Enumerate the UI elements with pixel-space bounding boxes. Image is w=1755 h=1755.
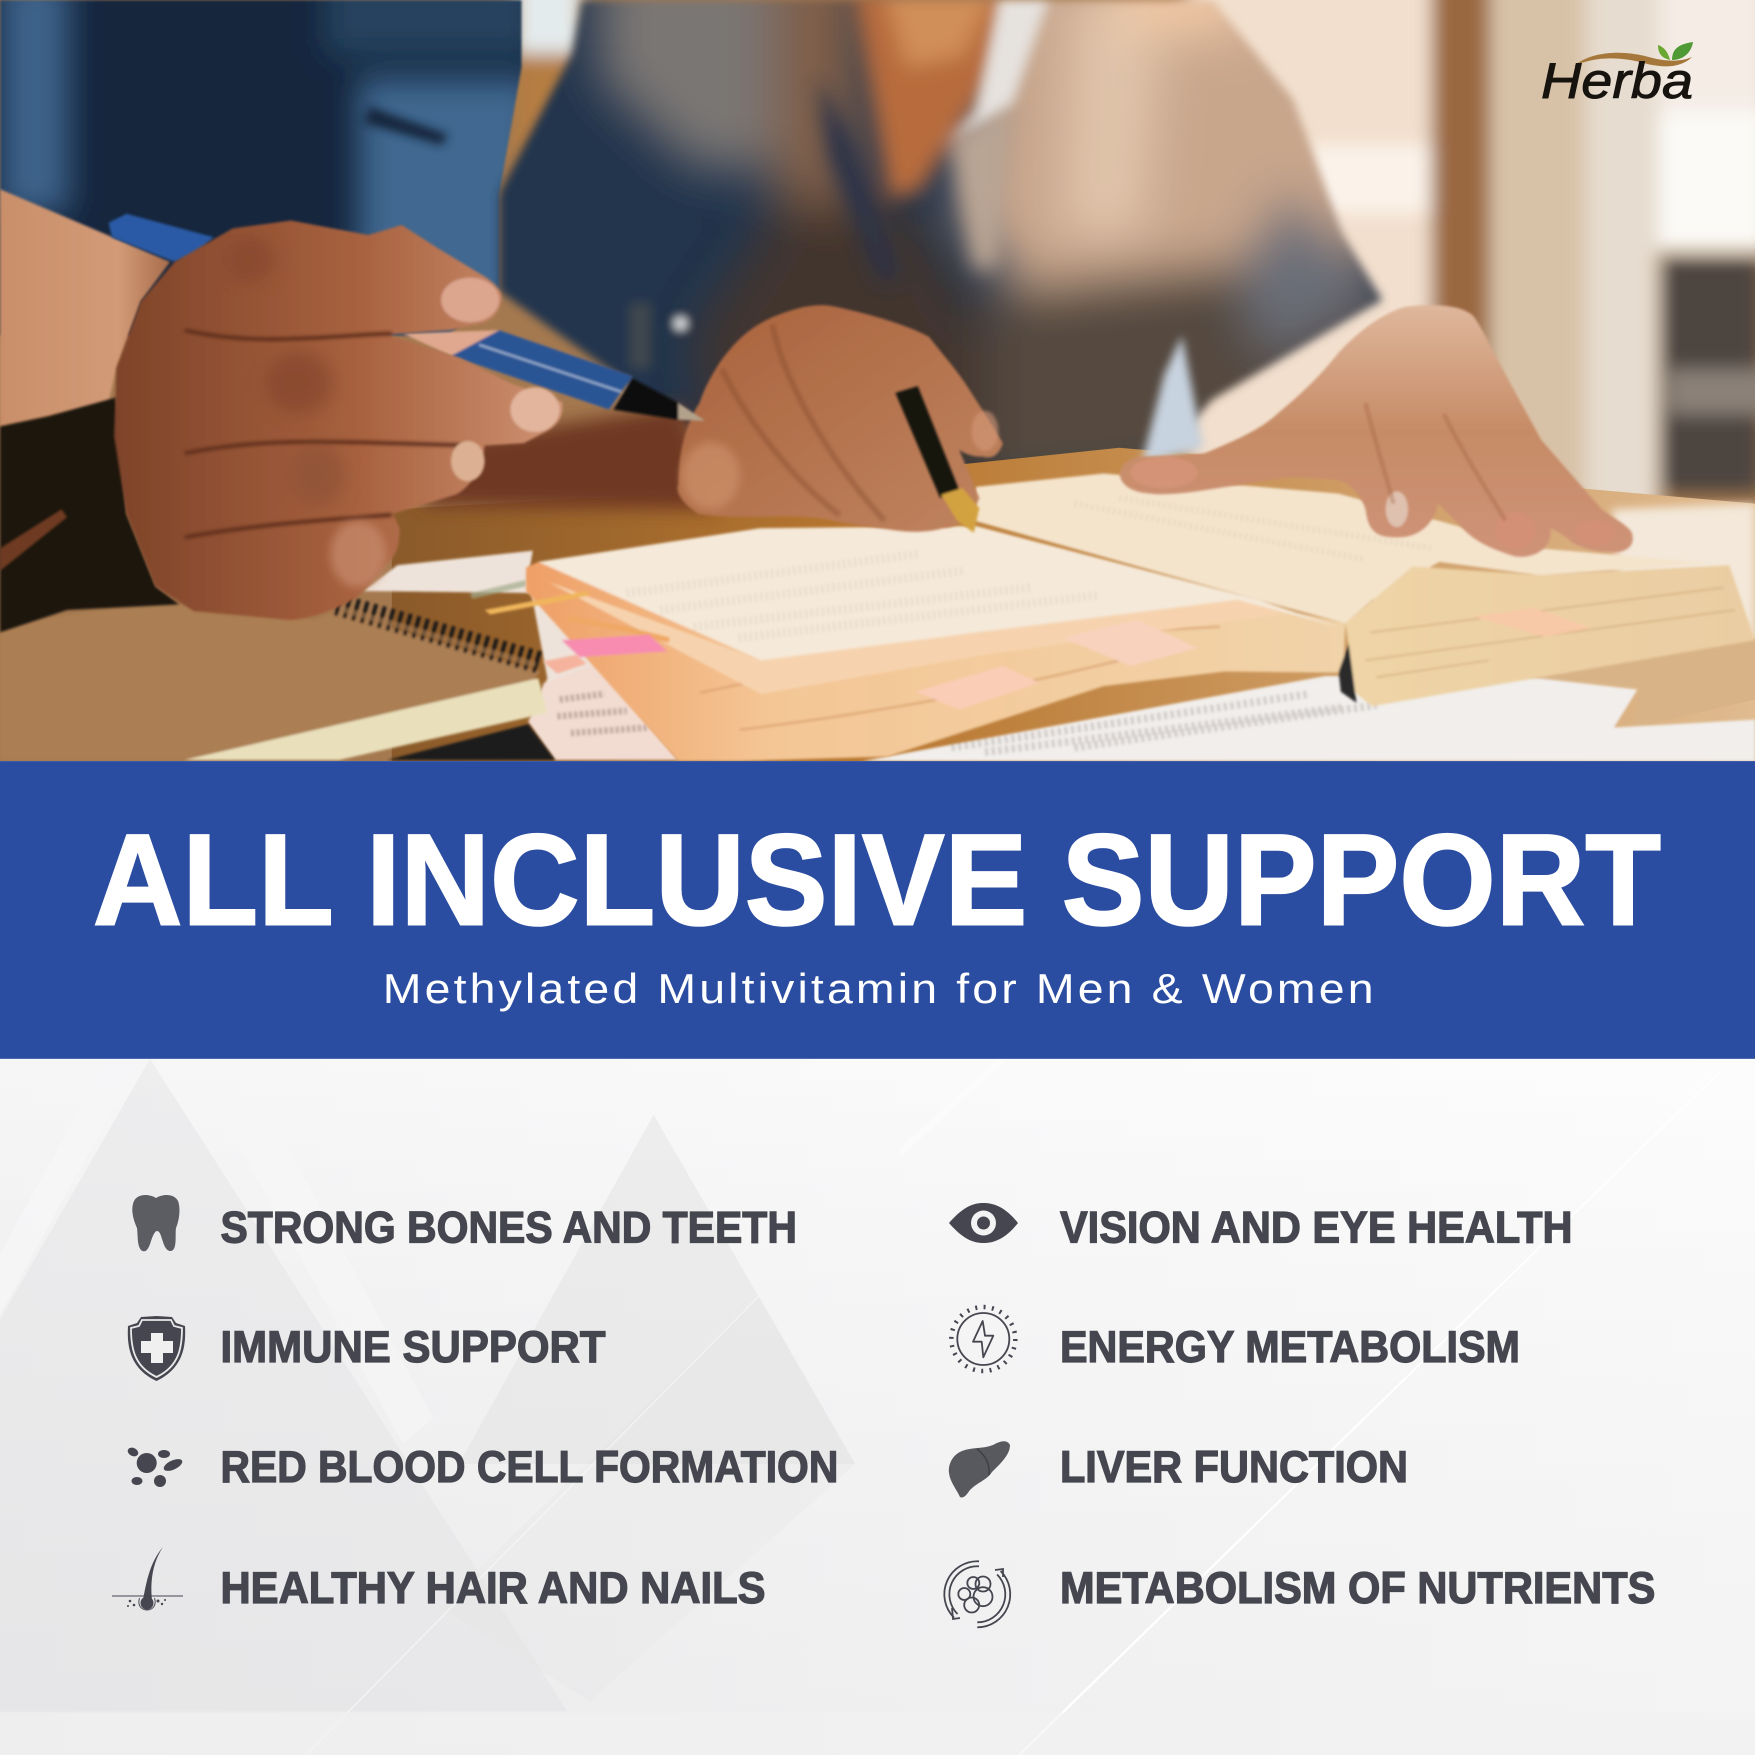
- table: [392, 448, 1755, 761]
- icon: shield: [128, 1316, 185, 1381]
- label: energy metabolism: ENERGY METABOLISM: [1060, 1322, 1520, 1372]
- icon: blood cells: [126, 1446, 184, 1487]
- background panel: [0, 1059, 1755, 1755]
- dark shadow under arm: [0, 397, 179, 632]
- hero photo: [0, 0, 1755, 761]
- icon: hair follicle: [112, 1547, 183, 1610]
- middle hand: [678, 305, 1003, 532]
- left person shirt: [0, 0, 537, 336]
- dark arm: [420, 405, 716, 509]
- icon: eye: [949, 1203, 1018, 1243]
- label: strong bones and teeth: STRONG BONES AND TEETH: [220, 1202, 797, 1252]
- label: vision and eye health: VISION AND EYE HEALTH: [1060, 1202, 1573, 1252]
- icon: tooth: [132, 1195, 179, 1251]
- center person shirt: [492, 0, 1388, 492]
- background window and curtain: [515, 0, 1755, 537]
- icon: energy: [951, 1307, 1015, 1371]
- tan table under paper: [1543, 638, 1755, 700]
- label: healthy hair and nails: HEALTHY HAIR AND NAILS: [220, 1563, 766, 1613]
- icon: liver: [949, 1441, 1010, 1497]
- blue pen: [109, 214, 705, 421]
- left forearm: [0, 189, 170, 426]
- subtitle: Methylated Multivitamin for Men & Women: [383, 966, 1377, 1012]
- notebook: [184, 597, 556, 761]
- label: metabolism of nutrients: METABOLISM OF NUTRIENTS: [1060, 1563, 1655, 1613]
- logo: Herba: [1541, 53, 1693, 109]
- title: ALL INCLUSIVE SUPPORT: [93, 807, 1661, 953]
- label: red blood cell formation: RED BLOOD CELL FORMATION: [220, 1442, 838, 1492]
- label: immune support: IMMUNE SUPPORT: [220, 1322, 606, 1372]
- paper with chart: [364, 551, 678, 760]
- blue title band: [0, 761, 1755, 1059]
- open book: [485, 473, 1755, 761]
- label: liver function: LIVER FUNCTION: [1060, 1442, 1408, 1492]
- bright table right: [1612, 504, 1755, 644]
- middle pen: [895, 386, 979, 533]
- right hand: [1120, 305, 1633, 557]
- left hand: [114, 220, 563, 620]
- lower paper: [862, 676, 1755, 761]
- blue sleeve sliver: [1142, 336, 1203, 464]
- notebook strap: [0, 509, 67, 571]
- icon: nutrient metabolism: [944, 1561, 1010, 1627]
